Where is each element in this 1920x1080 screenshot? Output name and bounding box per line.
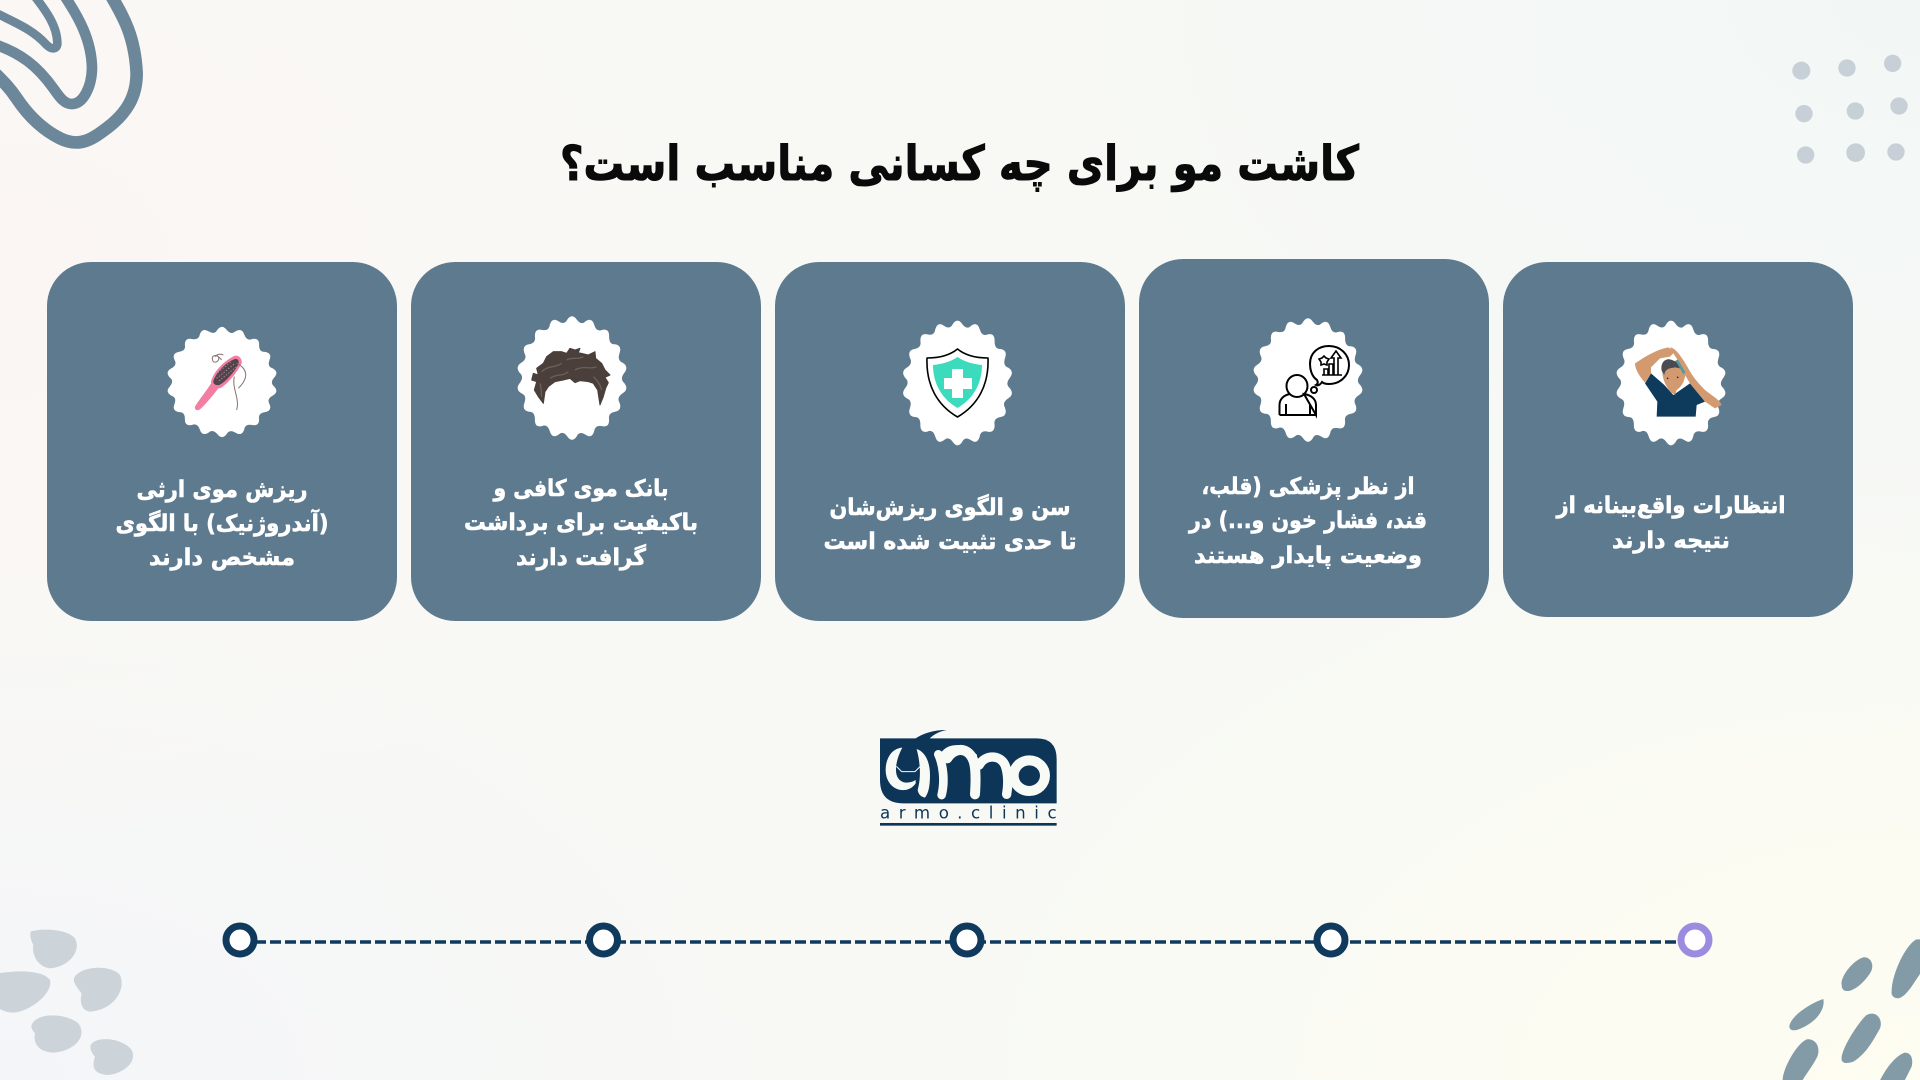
- text: age and pattern: [824, 494, 1076, 555]
- icon: man touching head: [1617, 321, 1725, 445]
- logo: armo clinic: armo.clinic: [880, 803, 1057, 822]
- panel: stable age and pattern: [775, 262, 1125, 621]
- text: hereditary hair loss: (آندروژنیک) با الگوی: [116, 508, 328, 537]
- timeline step 1: [226, 926, 254, 954]
- text: donor bank: [464, 476, 698, 571]
- text: realistic expectations: انتظارات واقع‌بینانه از: [1556, 493, 1786, 519]
- text: age and pattern: سن و الگوی ریزش‌شان: [830, 494, 1070, 521]
- text: donor bank: بانک موی کافی و: [493, 476, 668, 502]
- icon: hair: [518, 316, 626, 440]
- decoration: strokes bottom right: [1783, 939, 1920, 1080]
- text: medical stability: قند، فشار خون و...) در: [1188, 508, 1427, 534]
- timeline step 2: [590, 926, 618, 954]
- icon: shield: [903, 321, 1012, 445]
- text: age and pattern: تا حدی تثبیت شده است: [824, 529, 1076, 555]
- text: medical stability: [1188, 474, 1427, 569]
- text: medical stability: وضعیت پایدار هستند: [1194, 543, 1422, 569]
- text: hereditary hair loss: [116, 477, 328, 571]
- text: medical stability: از نظر پزشکی (قلب،: [1202, 474, 1414, 500]
- text: donor bank: گرافت دارند: [516, 544, 647, 571]
- timeline step 4: [1317, 926, 1345, 954]
- timeline step 3: [953, 926, 981, 954]
- panel: sufficient donor bank: [411, 262, 761, 621]
- panel: hereditary hair loss: [47, 262, 397, 621]
- decoration: swirl top left: [0, 0, 137, 142]
- icon: hair brush: [168, 327, 276, 437]
- text: hereditary hair loss: مشخص دارند: [149, 545, 295, 571]
- decoration: dots top right: [1792, 55, 1908, 164]
- title: کاشت مو برای چه کسانی مناسب است؟: [560, 136, 1359, 192]
- timeline step 5 active: [1681, 926, 1709, 954]
- text: realistic expectations: [1556, 493, 1786, 554]
- text: hereditary hair loss: ریزش موی ارثی: [136, 477, 308, 503]
- panel: medical stability: [1139, 259, 1489, 618]
- panel: realistic expectations: [1503, 262, 1853, 617]
- icon: person with thought bubble: [1254, 318, 1362, 442]
- timeline: [226, 926, 1709, 954]
- logo: armo clinic: [880, 730, 1057, 826]
- text: realistic expectations: نتیجه دارند: [1612, 528, 1730, 554]
- text: donor bank: باکیفیت برای برداشت: [464, 510, 698, 536]
- decoration: blobs bottom left: [0, 930, 133, 1075]
